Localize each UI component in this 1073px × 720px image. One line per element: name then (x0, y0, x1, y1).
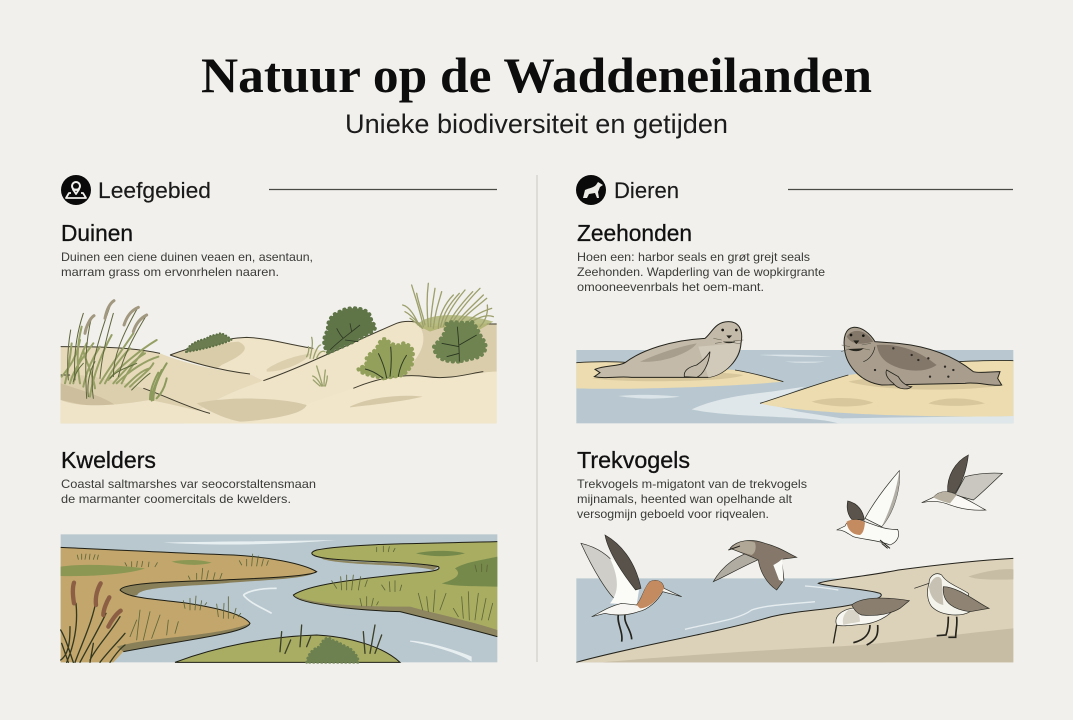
icon: animal (576, 175, 606, 205)
illustration: migratory birds (576, 455, 1013, 662)
bird 3 (837, 471, 900, 548)
text: Trekvogels description: Trekvogels m-migatont van de trekvogels (577, 477, 807, 491)
text: Duinen description: Duinen een ciene duinen veaen en, asentaun, (61, 250, 313, 264)
shrub (307, 638, 358, 662)
block: Duinen (61, 220, 497, 423)
illustration: seals (576, 322, 1013, 423)
grass small (307, 337, 327, 386)
grass right (417, 315, 493, 332)
sand right (760, 360, 1013, 417)
text: Zeehonden description: omooneevenrbals het oem-mant. (577, 280, 764, 294)
block: Trekvogels (576, 447, 1013, 662)
sand left (576, 362, 783, 389)
foam (692, 387, 1013, 423)
bush dark (324, 308, 375, 353)
bush right (434, 322, 486, 362)
bush light (358, 339, 413, 378)
marsh right (293, 542, 497, 637)
panel: leefgebied (61, 175, 497, 662)
heading: Duinen: Duinen (61, 220, 133, 246)
block: Zeehonden (576, 220, 1013, 423)
text: Duinen description: marram grass om ervonrhelen naaren. (61, 265, 279, 279)
text: Zeehonden description: Zeehonden. Wapderling van de wopkirgrante (577, 265, 825, 279)
bush back (186, 333, 232, 352)
heading: Zeehonden: Zeehonden (577, 220, 692, 246)
bird 2 (713, 541, 797, 590)
bird 4 (922, 455, 1002, 510)
section header: leefgebied (61, 175, 497, 205)
seal left (594, 322, 743, 378)
block: Kwelders (61, 447, 497, 662)
panel: dieren (576, 175, 1013, 662)
text: Trekvogels description: mijnamals, heented wan opelhande alt (577, 492, 793, 506)
heading: Trekvogels: Trekvogels (577, 447, 690, 473)
bird 5 (833, 598, 909, 645)
title: Natuur op de Waddeneilanden (201, 47, 872, 103)
illustration: salt marsh (61, 534, 497, 662)
grass tufts (77, 546, 493, 640)
marsh left (61, 547, 317, 662)
text: Kwelders description: de marmanter coomercitals de kwelders. (61, 492, 291, 506)
illustration: dunes (61, 283, 497, 423)
cattails (61, 583, 125, 662)
bird 6 (914, 574, 989, 637)
icon: map pin (61, 175, 91, 205)
marram grass (62, 301, 158, 398)
bird 1 (581, 535, 682, 642)
subtitle: Unieke biodiversiteit en getijden (345, 109, 728, 139)
seal right (841, 327, 1002, 389)
text: Zeehonden description: Hoen een: harbor seals en grøt grejt seals (577, 250, 810, 264)
heading: Dieren: Dieren (614, 178, 679, 203)
section header: dieren (576, 175, 1013, 205)
text: Kwelders description: Coastal saltmarshes var seocorstaltensmaan (61, 477, 316, 491)
marsh bottom (175, 635, 400, 662)
heading: Leefgebied: Leefgebied (98, 178, 211, 203)
heading: Kwelders: Kwelders (61, 447, 156, 473)
text: Trekvogels description: versogmijn geboeld voor riqvealen. (577, 507, 769, 521)
